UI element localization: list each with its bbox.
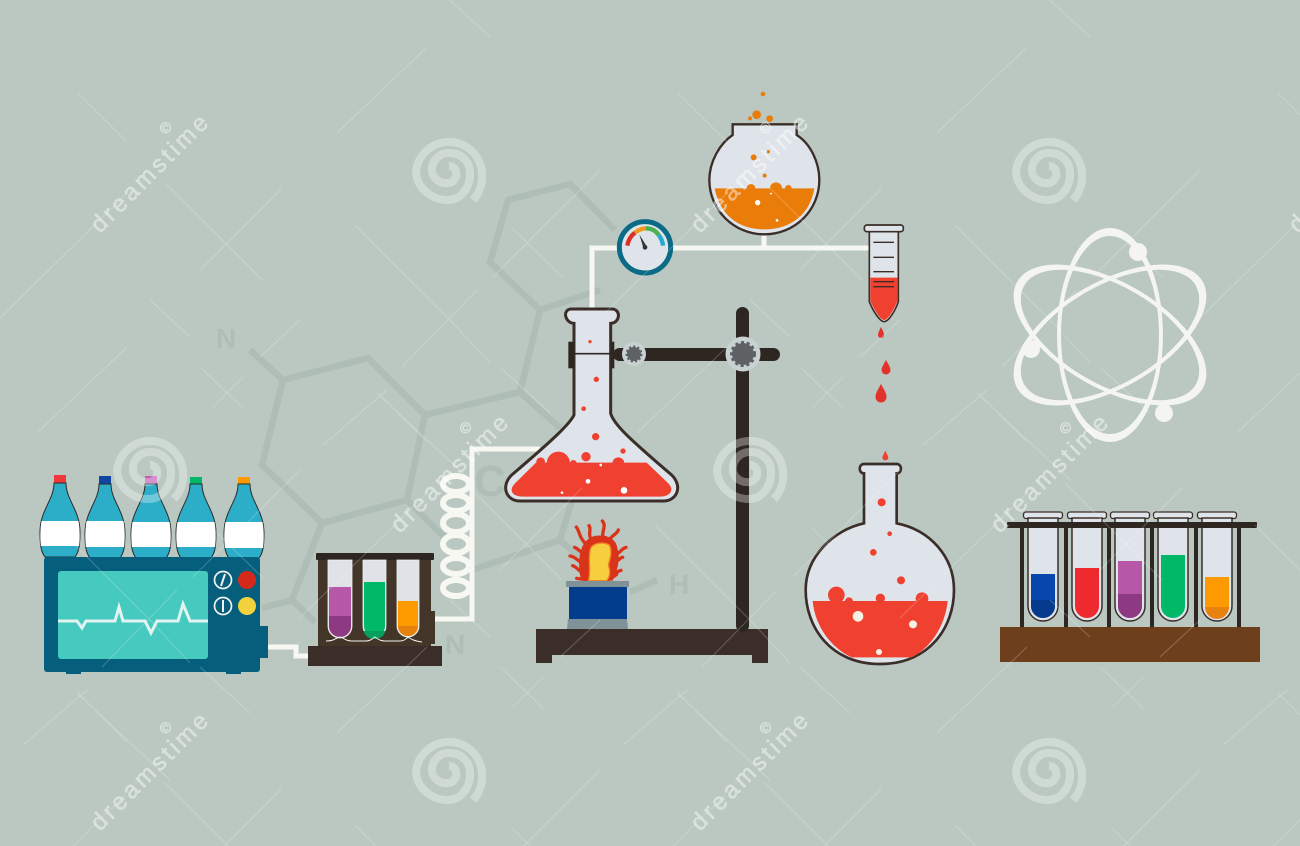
- red liquid and bubbles: [813, 451, 948, 657]
- watermark text: ©: [1060, 420, 1071, 437]
- purple tube: [328, 560, 352, 638]
- watermark text: dreamstime: [85, 708, 214, 836]
- heartbeat line: [58, 604, 208, 633]
- stand vertical rod: [736, 307, 749, 632]
- dropper test tube: [864, 225, 903, 322]
- background molecule diagram: N: [216, 323, 236, 354]
- clamp gears: [622, 336, 760, 372]
- burner flame: [570, 521, 626, 581]
- white connecting pipes: [268, 232, 870, 656]
- flame tendrils: [570, 521, 626, 580]
- background molecule diagram: C: [474, 457, 506, 506]
- dial buttons: [214, 571, 256, 615]
- falling red drops: [876, 327, 890, 403]
- row of bottles on the monitor: [40, 475, 264, 558]
- watermark text: dreamstime: [985, 410, 1114, 538]
- background molecule diagram: N: [445, 629, 465, 660]
- bottle 4: [176, 477, 216, 558]
- watermark text: ©: [160, 120, 171, 137]
- tube holder wire: [326, 637, 422, 642]
- bottle 5: [224, 477, 264, 558]
- watermark text: ©: [760, 720, 771, 737]
- orange tube: [397, 560, 419, 637]
- coil condenser: [443, 476, 469, 596]
- green tube: [1154, 512, 1192, 621]
- stand horizontal arm: [613, 348, 780, 361]
- red liquid and bubbles: [512, 340, 671, 497]
- monitor screen: [58, 571, 208, 659]
- rack posts: [1020, 528, 1241, 627]
- watermark text: dreamstime: [85, 110, 214, 238]
- bottle 2: [85, 476, 125, 558]
- flame body: [579, 535, 619, 581]
- small test tube rack: [308, 553, 442, 666]
- atom symbol: [991, 228, 1229, 442]
- watermark spirals: [117, 142, 1082, 800]
- background molecule diagram: H: [669, 569, 689, 600]
- watermark text: ©: [160, 720, 171, 737]
- watermark text: dreamstime: [385, 410, 514, 538]
- rack wooden base: [1000, 627, 1260, 662]
- top round flask: [709, 92, 819, 234]
- watermark text: dreamstime: [685, 708, 814, 836]
- orange tube: [1198, 512, 1236, 621]
- watermark text: dreamstime: [685, 110, 814, 238]
- pressure gauge: [619, 222, 671, 273]
- conical flask: [506, 309, 678, 501]
- large test tube rack: [1000, 512, 1260, 662]
- purple tube: [1110, 512, 1150, 621]
- orange liquid and bubbles: [715, 92, 814, 229]
- background molecule diagram: [216, 184, 689, 660]
- large round flask: [806, 451, 954, 664]
- monitor device: [44, 557, 268, 674]
- flame core: [588, 543, 611, 581]
- rack top bar: [1007, 522, 1257, 528]
- watermark text: ©: [760, 120, 771, 137]
- stand base: [536, 629, 768, 663]
- red tube: [1068, 512, 1106, 621]
- green tube: [363, 560, 386, 639]
- blue tube: [1024, 512, 1062, 621]
- retort stand: [536, 307, 780, 663]
- burner: [566, 581, 629, 629]
- watermark text: ©: [460, 420, 471, 437]
- bottle 3: [131, 476, 171, 558]
- bottle 1: [40, 475, 80, 557]
